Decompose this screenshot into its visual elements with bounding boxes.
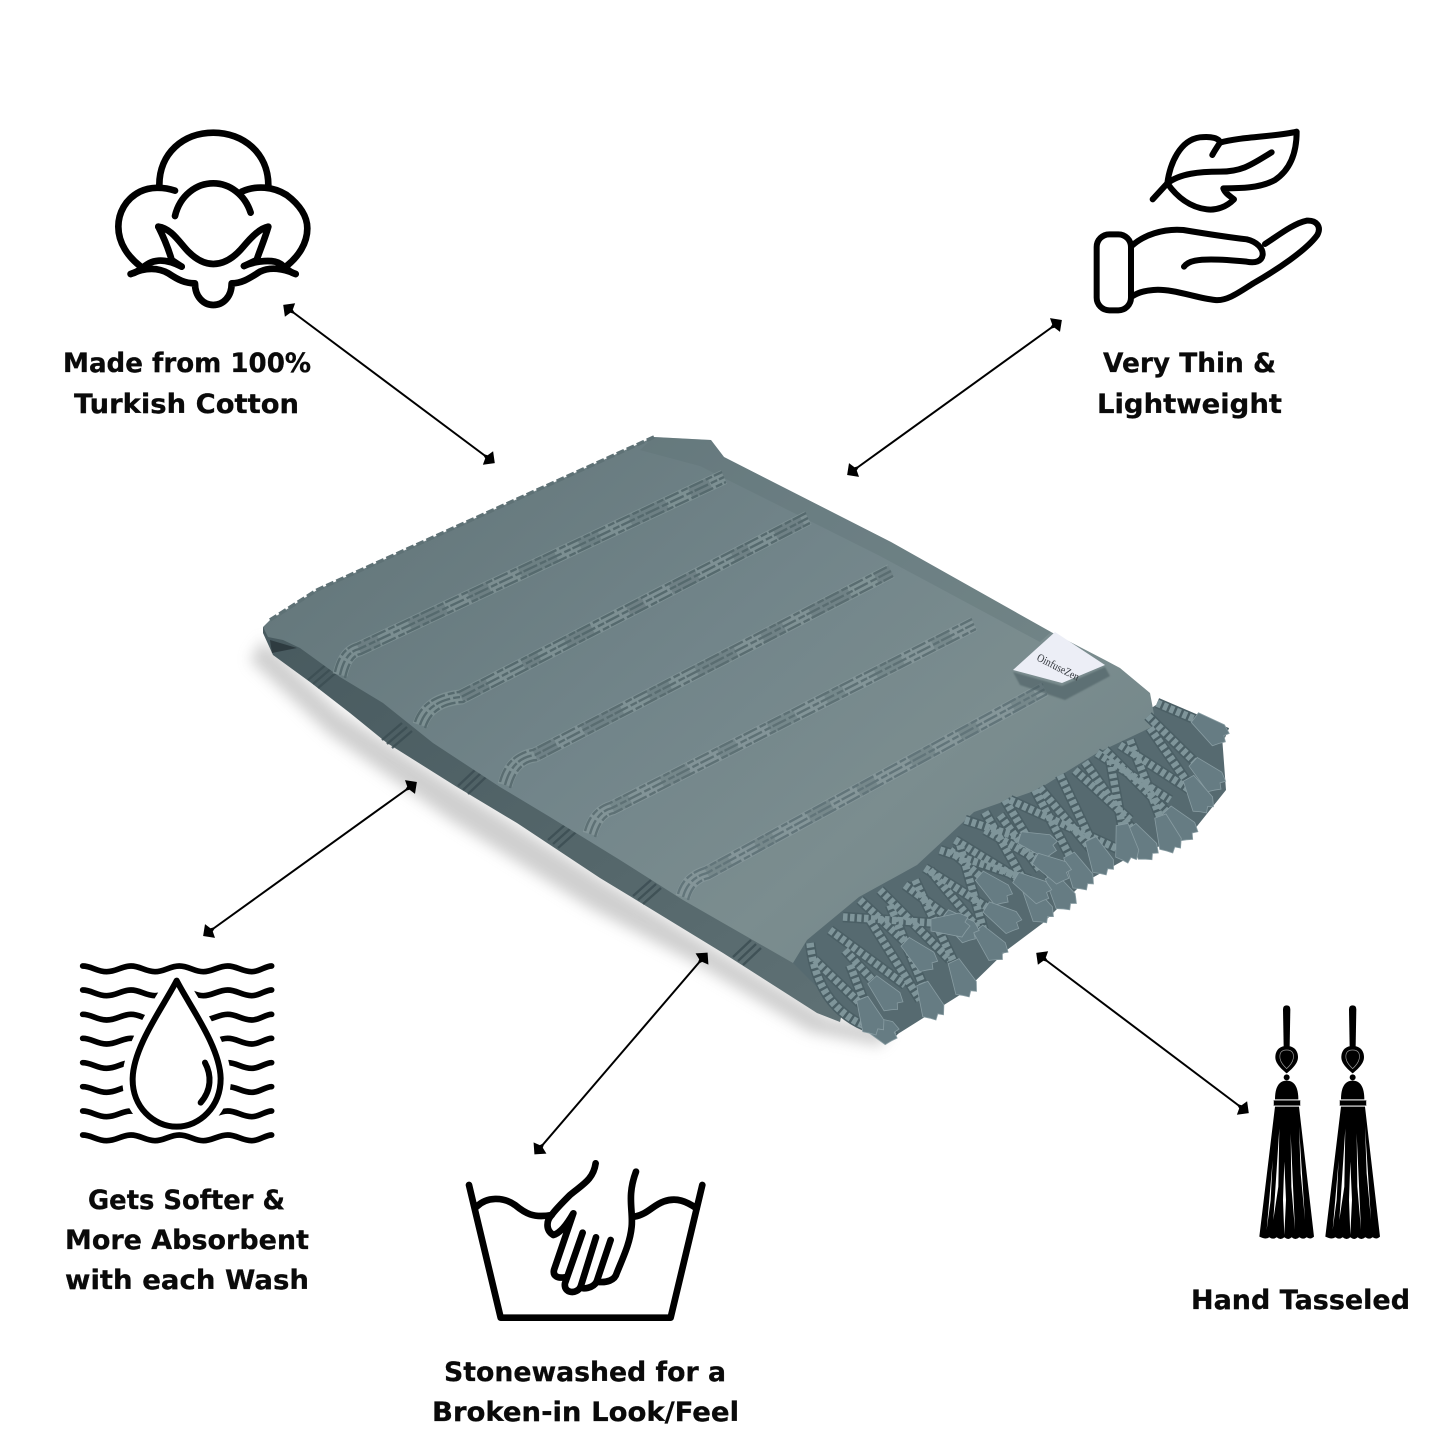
icon: two tassels xyxy=(1259,1005,1380,1239)
icon: cotton boll xyxy=(118,133,307,305)
icon: water drop with waves xyxy=(83,966,272,1141)
scalloped edge xyxy=(270,437,654,620)
label shadow xyxy=(1013,667,1110,700)
stripe 1 xyxy=(335,472,726,678)
fringe backing xyxy=(780,705,1226,1037)
middle waves xyxy=(83,990,272,1117)
top and bottom waves xyxy=(83,966,272,1141)
heading: softer: More Absorbent xyxy=(65,1225,309,1256)
woven stripes xyxy=(335,472,1047,900)
arrow: cotton to towel xyxy=(278,298,500,470)
heading: stonewashed xyxy=(432,1357,739,1428)
fold opening xyxy=(270,640,297,653)
drop outline xyxy=(133,981,221,1127)
top face hem xyxy=(640,437,1051,642)
arrow: tassels to towel xyxy=(1031,946,1254,1120)
heading: tasseled: Hand Tasseled xyxy=(1191,1285,1410,1316)
stripe 3 xyxy=(500,566,893,788)
heading: stonewashed: Broken-in Look/Feel xyxy=(432,1397,739,1428)
heading: cotton: Made from 100% xyxy=(63,348,311,379)
left tassel xyxy=(1259,1005,1314,1239)
icon: hand washing basin xyxy=(469,1163,702,1318)
fringe tassels xyxy=(851,708,1233,1048)
icon: feather over hand xyxy=(1097,132,1319,310)
heading: softer xyxy=(65,1185,309,1296)
arrow: absorbent to towel xyxy=(198,775,422,943)
heading: cotton: Turkish Cotton xyxy=(74,389,299,420)
towel photo xyxy=(250,437,1233,1048)
heading: lightweight: Very Thin & xyxy=(1103,348,1276,379)
towel shadow xyxy=(250,640,890,1046)
drop halo xyxy=(133,981,221,1127)
heading: lightweight: Lightweight xyxy=(1097,389,1282,420)
towel top face xyxy=(263,437,1156,963)
heading: cotton xyxy=(63,348,311,420)
fold side stripes xyxy=(308,663,761,965)
right tassel xyxy=(1325,1005,1380,1239)
heading: stonewashed: Stonewashed for a xyxy=(444,1357,726,1388)
stripe 5 xyxy=(678,684,1047,900)
fringe strands xyxy=(810,703,1227,1037)
heading: softer: with each Wash xyxy=(65,1265,309,1296)
towel fold side xyxy=(263,627,860,1022)
care label xyxy=(1013,632,1105,684)
heading: lightweight xyxy=(1097,348,1282,420)
arrow: lightweight to towel xyxy=(842,313,1067,482)
heading: softer: Gets Softer & xyxy=(88,1185,285,1216)
arrow: stonewashed to towel xyxy=(528,947,714,1160)
stripe 2 xyxy=(415,513,810,728)
care label: OinfuseZen xyxy=(1035,652,1081,684)
stripe 4 xyxy=(585,619,976,837)
